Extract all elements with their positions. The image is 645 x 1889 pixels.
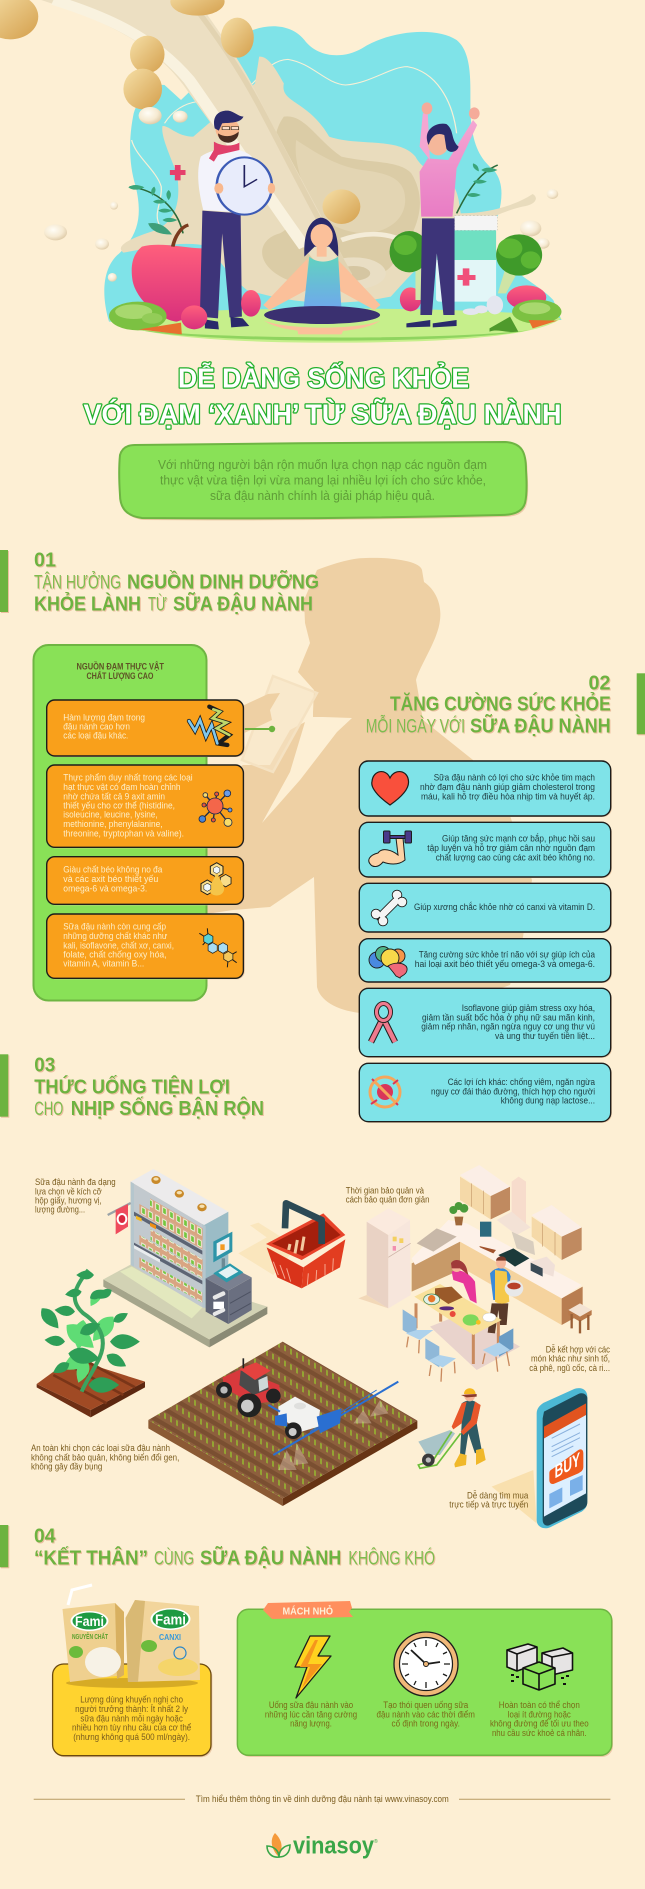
hero illustration (0, 0, 561, 343)
carton: calcium (126, 1600, 200, 1682)
tip: habit (377, 1700, 475, 1729)
tip: energy: năng lượng. (290, 1719, 332, 1729)
section 03 heading: THỨC UỐNG TIỆN LỢI (34, 1074, 230, 1098)
card: fats: Giàu chất béo không no đa (63, 865, 162, 875)
carrot left (139, 323, 182, 334)
sitting woman (263, 218, 380, 334)
title: DỄ DÀNG SỐNG KHỎE (178, 362, 469, 394)
tip: habit: đậu nành vào các thời điểm (377, 1709, 475, 1719)
section 04 heading: “KẾT THÂN” (34, 1545, 148, 1569)
callout text: sữa đậu nành mỗi ngày hoặc (80, 1713, 183, 1723)
carton: original: Fami (75, 1613, 104, 1629)
card: fats (47, 857, 245, 905)
tank (278, 1397, 320, 1432)
carton: original (62, 1603, 124, 1682)
card: other nutrients: vitamin A, vitamin B... (63, 959, 144, 969)
silhouette of person drinking (200, 558, 532, 1013)
caption: variety: lượng đường... (35, 1205, 85, 1215)
card: other nutrients: những dưỡng chất khác như (63, 931, 167, 941)
milk droplets (44, 107, 558, 282)
teal blob backdrop (104, 26, 561, 322)
panel: health benefits (359, 761, 612, 1123)
card: amino acids: isoleucine, leucine, lysine, (63, 810, 158, 820)
section 01 heading (0, 548, 319, 616)
logo: vinasoy: ® (374, 1838, 378, 1845)
tip: sugar: nhu cầu sức khoẻ cá nhân. (492, 1728, 587, 1738)
intro text: sữa đậu nành chính là giải pháp hiệu quả. (210, 489, 435, 503)
card: protein content: Hàm lượng đạm trong (63, 712, 145, 722)
section 04 heading: CÙNG (154, 1547, 194, 1569)
section 04 heading: SỮA ĐẬU NÀNH (200, 1545, 341, 1569)
illustration: kitchen (358, 1165, 592, 1382)
caption: buying (449, 1490, 528, 1510)
caption: safety: An toàn khi chọn các loại sữa đậu nành (31, 1443, 170, 1453)
section 02 heading: MỖI NGÀY VỚI (366, 715, 465, 737)
card: bone: Giúp xương chắc khỏe nhờ có canxi và vitamin D. (414, 902, 595, 912)
card: brain: Tăng cường sức khỏe trí não với sự giúp ích của (419, 950, 595, 960)
card: other nutrients: Sữa đậu nành còn cung cấp (63, 922, 166, 932)
milk splash (121, 57, 536, 303)
card: protein content (47, 700, 245, 757)
illustration: phone (492, 1388, 587, 1528)
callout text: nhiều hơn tùy nhu cầu của cơ thể (72, 1723, 191, 1733)
caption: safety (31, 1443, 179, 1472)
card: protein content: đậu nành cao hơn (63, 722, 130, 732)
card: other benefits: nguy cơ đái tháo đường, thích hợp cho người (431, 1086, 595, 1096)
callout: daily amount (53, 1664, 212, 1757)
caption: combining: món khác như sinh tố, (531, 1354, 610, 1364)
small apples (181, 285, 546, 329)
ground (109, 309, 561, 343)
section 04 heading (0, 1525, 435, 1569)
card: ribbon: giảm nếp nhăn, ngăn ngừa nguy cơ ung thư vú (421, 1022, 595, 1032)
card: protein content: các loại đậu khác. (63, 731, 128, 741)
intro text: Với những người bận rộn muốn lựa chọn nạp các nguồn đạm (158, 458, 487, 472)
red cross left (170, 165, 186, 180)
caption: variety: lựa chọn về kích cỡ (35, 1186, 102, 1196)
card: heart (359, 761, 612, 817)
standing woman (406, 102, 480, 327)
section 03 heading: NHỊP SỐNG BẬN RỘN (71, 1096, 264, 1120)
man cooking (488, 1256, 523, 1333)
section 01 heading: NGUỒN DINH DƯỠNG (127, 570, 319, 594)
caption: variety (35, 1177, 116, 1215)
left branch (128, 185, 183, 233)
panel heading: NGUỒN ĐẠM THỰC VẬT (76, 660, 164, 672)
panel heading (76, 660, 164, 681)
section 02 heading: TĂNG CƯỜNG SỨC KHỎE (390, 692, 611, 716)
card: amino acids: methionine, phenylalanine, (63, 819, 163, 829)
caption: storage: Thời gian bảo quản và (346, 1185, 424, 1195)
icon: protein helix (189, 707, 229, 745)
tip: sugar: không đường để tối ưu theo (490, 1719, 589, 1729)
product rows (150, 1198, 203, 1240)
panel: tips (237, 1601, 613, 1757)
icon: chemical compound (199, 928, 237, 967)
card: other nutrients: folate, chất chống oxy hóa, (63, 950, 167, 960)
tag: mach nho (263, 1601, 353, 1619)
product: Fami cartons (62, 1585, 200, 1688)
intro text: thực vật vừa tiện lợi vừa mang lại nhiều lợi ích cho sức khỏe, (160, 474, 486, 488)
card: amino acids (47, 765, 245, 848)
card: other nutrients (47, 914, 245, 979)
section 03 heading (0, 1054, 264, 1120)
chairs (403, 1309, 513, 1382)
card: amino acids: thiết yếu cho cơ thể (histidine, (63, 800, 175, 810)
icon: omega oil (201, 863, 231, 895)
card: muscle: Giúp tăng sức mạnh cơ bắp, phục hồi sau (442, 834, 595, 844)
callout text (72, 1695, 191, 1742)
logo: vinasoy: vinasoy (293, 1832, 375, 1859)
section 03 heading: 03 (34, 1054, 55, 1077)
buy label: BUY (555, 1449, 580, 1483)
card: heart: máu, kali hỗ trợ điều hòa nhịp tim và huyết áp. (421, 791, 595, 801)
callout text: (nhưng không quá 500 ml/ngày). (73, 1732, 190, 1742)
tip: habit: cố định trong ngày. (392, 1719, 460, 1729)
section 04 heading: 04 (34, 1525, 56, 1548)
caption: safety: không gây đầy bụng (31, 1462, 102, 1472)
card: heart: nhờ đạm đậu nành giúp giảm cholesterol trong (420, 782, 595, 792)
tip: energy: Uống sữa đậu nành vào (269, 1700, 353, 1710)
tractor (223, 1369, 281, 1404)
title: VỚI ĐẠM ‘XANH’ TỪ SỮA ĐẬU NÀNH (84, 398, 562, 430)
section 01 heading: SỮA ĐẬU NÀNH (173, 592, 313, 616)
card: other nutrients: kali, isoflavone, chất xơ, canxi, (63, 940, 174, 950)
card: fats: và các axit béo thiết yếu (63, 874, 158, 884)
pills (463, 296, 503, 315)
intro text (158, 458, 487, 503)
card: amino acids: nhờ chứa tất cả 9 axit amin (63, 791, 165, 801)
card: bone (359, 883, 612, 933)
section 01 heading: TỪ (148, 594, 167, 616)
glass (242, 676, 317, 772)
table (416, 1303, 498, 1364)
big apple (132, 245, 202, 322)
card: ribbon: và ung thư tuyến tiền liệt... (495, 1031, 595, 1041)
caption: combining: Dễ kết hợp với các (546, 1344, 611, 1354)
stool (568, 1303, 592, 1317)
caption: combining: cà phê, ngũ cốc, cà ri... (529, 1363, 610, 1373)
illustration: store shelf (103, 1169, 267, 1347)
caption: storage: cách bảo quản đơn giản (346, 1195, 429, 1205)
caption: buying: Dễ dàng tìm mua (467, 1490, 528, 1500)
woman cooking (451, 1260, 477, 1303)
illustration: farm field (148, 1342, 417, 1506)
icon: sugar cubes (507, 1644, 572, 1690)
card: ribbon: Isoflavone giúp giảm stress oxy hóa, (462, 1003, 595, 1013)
tip: sugar: loại ít đường hoặc (508, 1709, 571, 1719)
bush left (109, 302, 167, 330)
intro callout (119, 442, 528, 520)
carton: calcium: Fami (155, 1612, 186, 1628)
caption: combining (529, 1344, 611, 1373)
panel heading: CHẤT LƯỢNG CAO (86, 671, 154, 681)
card: amino acids: hạt thực vật có đạm hoàn chỉnh (63, 782, 181, 792)
bush and broccoli right (512, 300, 561, 324)
card: brain (359, 939, 612, 983)
section 03 heading: CHO (34, 1099, 63, 1120)
icon: lightning bolt (295, 1636, 331, 1698)
card: muscle: chất lượng cao cùng các axit béo không no. (436, 852, 595, 862)
card: heart: Sữa đậu nành có lợi cho sức khỏe tim mạch (434, 773, 595, 783)
connector dot (243, 726, 275, 732)
hand fingers (240, 693, 280, 735)
title (84, 362, 562, 430)
tip: energy: những lúc cần tăng cường (265, 1709, 357, 1719)
section 01 heading: KHỎE LÀNH (34, 592, 141, 616)
standing man (198, 111, 275, 329)
sprayer spray (278, 1400, 388, 1470)
caption: variety: hộp giấy, hương vị, (35, 1196, 102, 1206)
caption: buying: trực tiếp và trực tuyến (449, 1500, 528, 1510)
card: ribbon (359, 988, 612, 1058)
card: ribbon: giảm tần suất bốc hỏa ở phụ nữ sau mãn kinh, (422, 1012, 595, 1022)
footer note: Tìm hiểu thêm thông tin về dinh dưỡng đậu nành tại www.vinasoy.com (196, 1794, 449, 1804)
section 01 heading: 01 (34, 548, 56, 572)
icon: molecule (199, 790, 232, 826)
milk stream (41, 0, 353, 277)
tip: sugar: Hoàn toàn có thể chọn (499, 1700, 580, 1710)
card: amino acids: threonine, tryptophan và valine). (63, 828, 184, 838)
right branch (457, 162, 498, 213)
caption: safety: không chất bảo quản, không biến đổi gen, (31, 1452, 179, 1462)
card: amino acids: Thực phẩm duy nhất trong các loại (63, 773, 193, 783)
tag: mach nho: MÁCH NHỎ (282, 1604, 333, 1617)
plant on counter (449, 1202, 468, 1214)
illustration: gardener (418, 1388, 486, 1468)
card: other benefits: không dung nạp lactose... (501, 1096, 595, 1106)
fridge (367, 1222, 388, 1308)
card: muscle: tập luyện và hỗ trợ giảm cân nhờ nguồn đạm (427, 843, 595, 853)
medicine bottle (436, 216, 497, 302)
card: brain: hai loại axit béo thiết yếu omega-3 và omega-6. (415, 959, 595, 969)
illustration: shopping basket (238, 1203, 345, 1288)
soybeans (0, 0, 360, 224)
icon: clock (394, 1632, 458, 1696)
card: fats: omega-6 và omega-3. (63, 884, 147, 894)
panel: plant protein (34, 645, 275, 1000)
card: other benefits: Các lợi ích khác: chống viêm, ngăn ngừa (448, 1077, 595, 1087)
callout text: người trưởng thành: Ít nhất 2 ly (75, 1704, 189, 1714)
tip: sugar (490, 1700, 589, 1738)
card: muscle (359, 822, 612, 878)
carton: calcium: CANXI (159, 1633, 181, 1642)
tip: habit: Tạo thói quen uống sữa (383, 1700, 468, 1710)
section 04 heading: KHÔNG KHÓ (348, 1547, 435, 1569)
card: other benefits (359, 1063, 612, 1123)
section 01 heading: TẬN HƯỞNG (34, 572, 121, 594)
callout text: Lượng dùng khuyến nghị cho (80, 1695, 183, 1705)
tip: energy (265, 1700, 357, 1729)
caption: storage (346, 1185, 429, 1205)
carton: original: NGUYÊN CHẤT (72, 1631, 109, 1641)
decorative curves (132, 59, 457, 227)
broccoli (390, 231, 542, 300)
section 02 heading (366, 671, 645, 737)
section 02 heading: SỮA ĐẬU NÀNH (470, 713, 611, 737)
section 02 heading: 02 (588, 671, 610, 694)
cash counter (206, 1278, 228, 1324)
caption: variety: Sữa đậu nành đa dạng (35, 1177, 116, 1187)
illustration: soybean plant (37, 1270, 145, 1417)
